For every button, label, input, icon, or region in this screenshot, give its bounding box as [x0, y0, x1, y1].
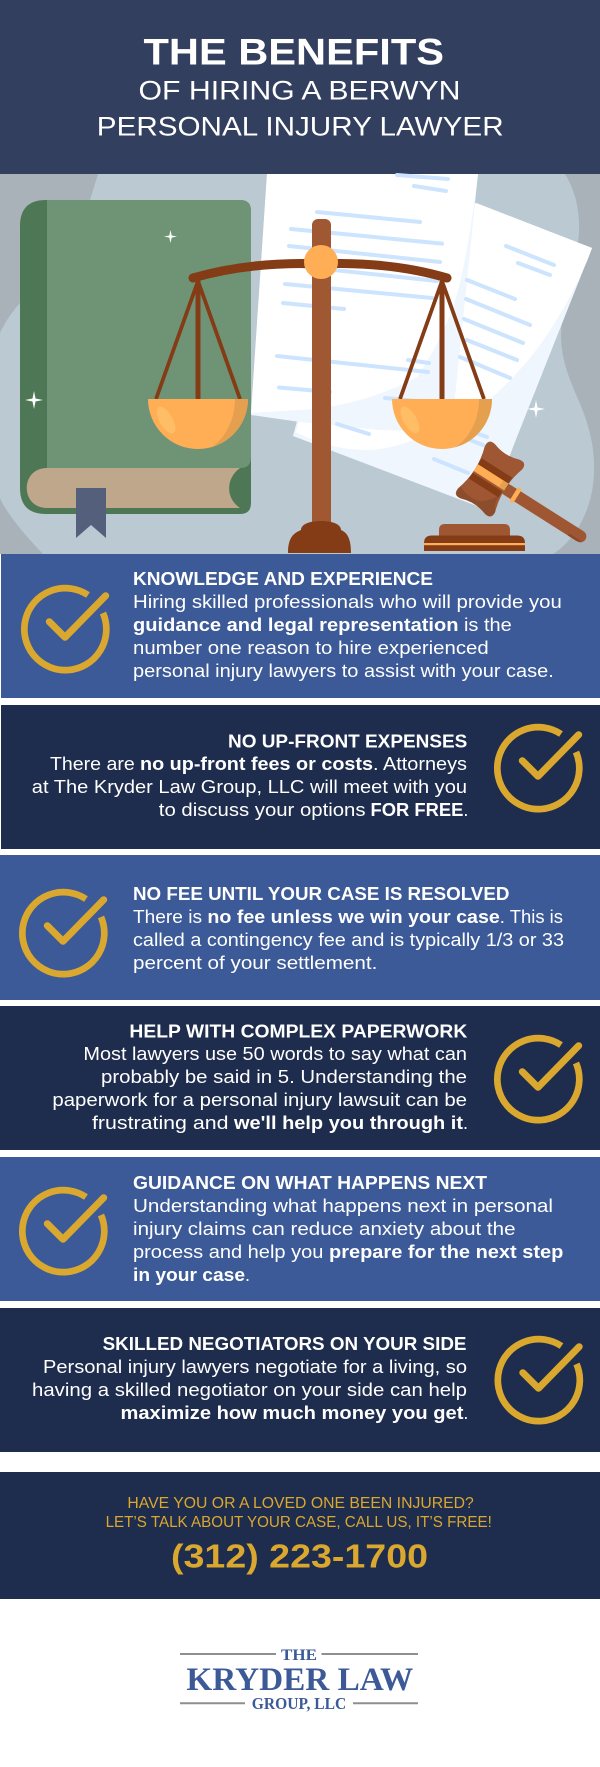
- text block: personal injury lawyers to assist with your case.: [133, 661, 554, 681]
- panel: guidance on what happens next: [0, 1157, 600, 1301]
- logo: The Kryder Law Group, LLC: KRYDER LAW: [186, 1662, 413, 1698]
- panel: skilled negotiators on your side: [0, 1308, 600, 1452]
- logo: The Kryder Law Group, LLC: GROUP, LLC: [252, 1694, 346, 1713]
- text block: no fee unless we win your case: [207, 907, 500, 927]
- text block: having a skilled negotiator on your side can help: [32, 1380, 467, 1400]
- text block: .: [463, 800, 468, 820]
- text block: guidance and legal representation: [133, 615, 458, 635]
- text block: FOR FREE: [370, 800, 463, 820]
- logo: The Kryder Law Group, LLC: [180, 1647, 418, 1713]
- icon: check mark: [497, 1038, 579, 1120]
- text block: probably be said in 5. Understanding the: [101, 1067, 467, 1087]
- panel: no up-front expenses: [1, 705, 600, 849]
- text block: [32, 754, 468, 820]
- text block: in your case: [133, 1265, 245, 1285]
- text block: we'll help you through it: [233, 1113, 463, 1133]
- text block: Hiring skilled professionals who will provide you: [133, 592, 562, 612]
- right pan: [392, 281, 492, 449]
- text block: number one reason to hire experienced: [133, 638, 489, 658]
- title: THE BENEFITS: [144, 30, 444, 72]
- text block: .: [463, 1403, 468, 1423]
- text block: There are: [50, 754, 135, 774]
- text block: There is: [133, 907, 202, 927]
- text block: at The Kryder Law Group, LLC will meet with you: [32, 777, 467, 797]
- text block: frustrating and: [92, 1113, 228, 1133]
- scales of justice: [148, 219, 492, 553]
- text block: [32, 1357, 468, 1423]
- title: PERSONAL INJURY LAWYER: [97, 112, 504, 142]
- text block: [133, 907, 564, 973]
- logo: The Kryder Law Group, LLC: THE: [281, 1647, 317, 1664]
- heading: SKILLED NEGOTIATORS ON YOUR SIDE: [103, 1333, 466, 1354]
- text block: [52, 1044, 468, 1133]
- call to action text: [106, 1495, 492, 1531]
- text block: process and help you: [133, 1242, 323, 1262]
- phone number: (312) 223-1700: [171, 1538, 428, 1575]
- heading: GUIDANCE ON WHAT HAPPENS NEXT: [133, 1172, 488, 1193]
- call to action panel: [0, 1472, 600, 1599]
- title: [97, 30, 504, 142]
- papers: [251, 174, 592, 511]
- book: [20, 200, 251, 538]
- text block: maximize how much money you get: [120, 1403, 463, 1423]
- heading: HELP WITH COMPLEX PAPERWORK: [129, 1020, 468, 1041]
- icon: check mark: [24, 588, 106, 670]
- text block: prepare for the next step: [329, 1242, 563, 1262]
- text block: is the: [464, 615, 512, 635]
- text block: to discuss your options: [159, 800, 366, 820]
- illustration: book, scales, papers and gavel: [0, 174, 600, 567]
- panel: help with complex paperwork: [0, 1006, 600, 1150]
- text block: Most lawyers use 50 words to say what can: [83, 1044, 467, 1064]
- call to action text: LET’S TALK ABOUT YOUR CASE, CALL US, IT’S FREE!: [106, 1514, 492, 1531]
- icon: bookmark: [76, 488, 106, 538]
- icon: check mark: [497, 727, 579, 809]
- panel: no fee until your case is resolved: [0, 855, 600, 1000]
- text block: . Attorneys: [373, 754, 467, 774]
- gavel: [424, 440, 600, 567]
- text block: percent of your settlement.: [133, 953, 377, 973]
- text block: called a contingency fee and is typically 1/3 or 33: [133, 930, 564, 950]
- text block: Understanding what happens next in personal: [133, 1196, 553, 1216]
- text block: no up-front fees or costs: [140, 754, 373, 774]
- text block: injury claims can reduce anxiety about the: [133, 1219, 516, 1239]
- text block: Personal injury lawyers negotiate for a living, so: [43, 1357, 467, 1377]
- text block: .: [463, 1113, 468, 1133]
- icon: check mark: [22, 1190, 104, 1272]
- title: OF HIRING A BERWYN: [138, 76, 460, 106]
- panel: knowledge and experience: [1, 554, 600, 698]
- heading: NO FEE UNTIL YOUR CASE IS RESOLVED: [133, 883, 509, 904]
- gavel sound block: [424, 524, 525, 551]
- text block: . This is: [500, 907, 563, 927]
- text block: paperwork for a personal injury lawsuit can be: [52, 1090, 467, 1110]
- text block: [133, 592, 562, 681]
- icon: check mark: [498, 1339, 580, 1421]
- heading: NO UP-FRONT EXPENSES: [228, 730, 467, 751]
- call to action text: HAVE YOU OR A LOVED ONE BEEN INJURED?: [127, 1495, 474, 1512]
- text block: [133, 1196, 563, 1285]
- icon: check mark: [22, 892, 104, 974]
- left pan: [148, 281, 248, 449]
- text block: .: [245, 1265, 250, 1285]
- icon: sparkles: [25, 230, 545, 418]
- header banner: [0, 0, 600, 174]
- heading: KNOWLEDGE AND EXPERIENCE: [133, 568, 433, 589]
